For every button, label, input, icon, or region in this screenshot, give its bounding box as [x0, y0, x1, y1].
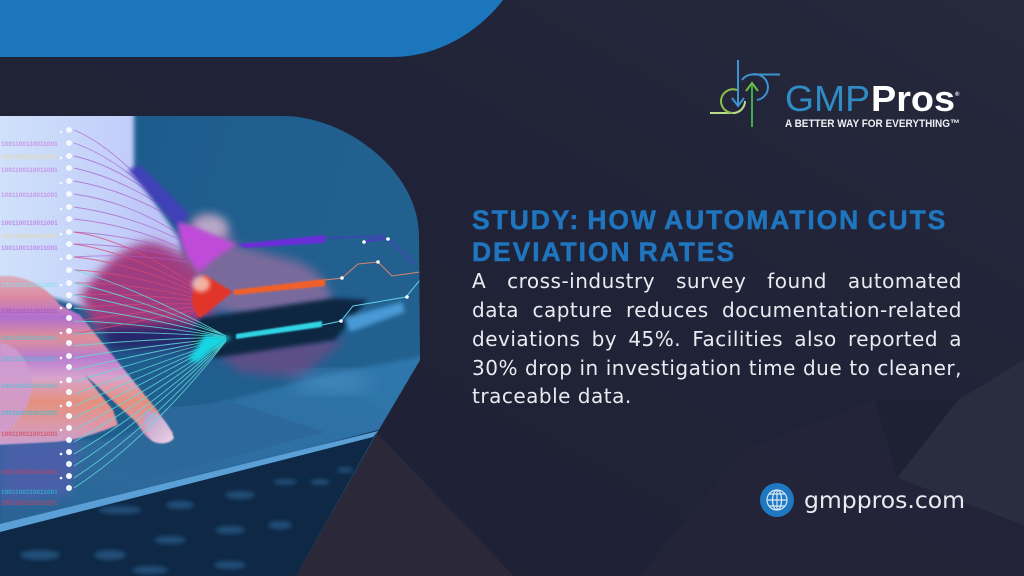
- cyan stream: [188, 280, 420, 362]
- logo: [710, 60, 960, 130]
- back hand holding phone: [80, 216, 345, 378]
- binary text rows: 1001100110011001: [1, 356, 58, 363]
- logo wordmark: ®: [955, 91, 960, 98]
- photo: hands on laptop with data streams: [0, 110, 430, 576]
- front hand: [0, 276, 174, 445]
- white data dots: [60, 127, 72, 491]
- binary text rows: 1001100110011001: [1, 489, 58, 496]
- binary text rows: 1001100110011001: [1, 469, 58, 476]
- body text: deviations by 45%. Facilities also reported a: [472, 327, 962, 351]
- heading: [472, 205, 947, 267]
- body text: [472, 269, 962, 408]
- body text: A cross-industry survey found automated: [472, 269, 962, 293]
- website address: gmppros.com: [804, 486, 965, 514]
- logo wordmark: Pros: [871, 78, 955, 119]
- body text: data capture reduces documentation-related: [472, 298, 962, 322]
- binary text rows: 1001100110011001: [1, 154, 58, 161]
- logo wordmark: GMP: [785, 78, 870, 119]
- binary text rows: 1001100110011001: [1, 192, 58, 199]
- top blue banner: [0, 0, 503, 57]
- data streams: fan lines: [74, 130, 226, 488]
- binary text rows: 1001100110011001: [1, 220, 58, 227]
- binary text rows: 1001100110011001: [1, 141, 58, 148]
- binary text rows: 1001100110011001: [1, 308, 58, 315]
- binary text rows: 1001100110011001: [1, 282, 58, 289]
- area below fingers left: [0, 440, 80, 505]
- binary text rows: 1001100110011001: [1, 383, 58, 390]
- icon: globe: [760, 483, 794, 517]
- binary text rows: 1001100110011001: [1, 167, 58, 174]
- body text: traceable data.: [472, 384, 632, 408]
- laptop lid surface: [0, 355, 430, 528]
- heading line 1: STUDY: HOW AUTOMATION CUTS: [472, 205, 947, 235]
- phone: [190, 298, 405, 358]
- binary text rows: 1001100110011001: [1, 335, 58, 342]
- purple stream: [128, 165, 416, 272]
- logo tagline: A BETTER WAY FOR EVERYTHING™: [785, 118, 960, 130]
- binary text rows: 1001100110011001: [1, 233, 58, 240]
- red stream: [192, 260, 420, 318]
- trackpad: [160, 402, 324, 450]
- binary text rows: 1001100110011001: [1, 431, 58, 438]
- icon: logo mark: [710, 60, 780, 127]
- body text: 30% drop in investigation time due to cleaner,: [472, 356, 962, 380]
- shirt: [0, 116, 184, 310]
- binary text rows: 1001100110011001: [1, 245, 58, 252]
- laptop front edge: [0, 431, 378, 532]
- keyboard: [0, 430, 378, 576]
- binary text rows: 1001100110011001: [1, 500, 58, 507]
- binary text rows: 1001100110011001: [1, 410, 58, 417]
- binary text rows: [1, 141, 58, 507]
- logo wordmark: [785, 78, 960, 119]
- heading line 2: DEVIATION RATES: [472, 237, 736, 267]
